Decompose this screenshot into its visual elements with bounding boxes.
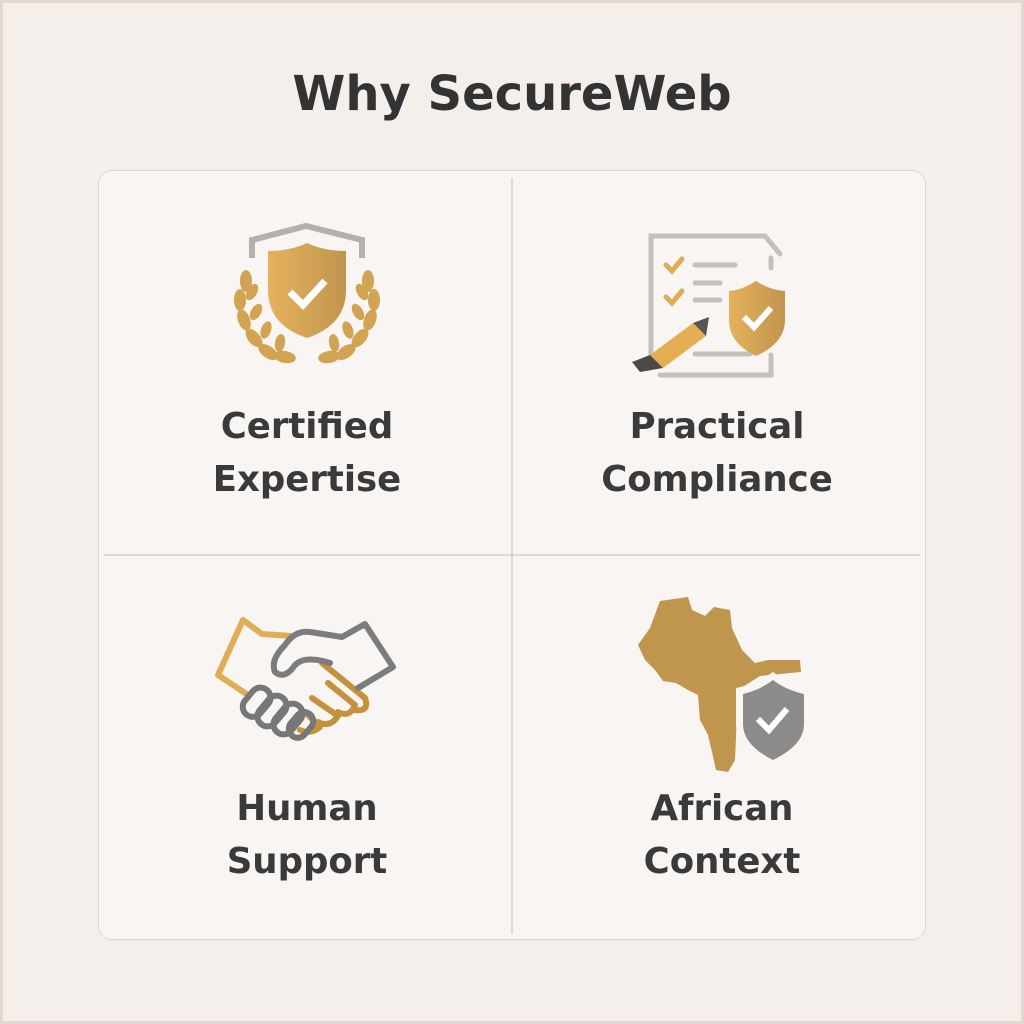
label: Certified Expertise — [213, 406, 401, 500]
label: Practical Compliance — [601, 406, 833, 500]
icon: handshake — [218, 620, 393, 742]
panel: grid — [98, 170, 926, 940]
label: Human Support — [227, 788, 387, 882]
label: Practical Compliance: Practical — [630, 406, 804, 447]
icon: africa with shield — [638, 597, 810, 772]
label: Certified Expertise: Expertise — [213, 459, 401, 500]
label: African Context: Context — [644, 841, 800, 882]
icon: shield with laurels — [234, 226, 380, 365]
label: Practical Compliance: Compliance — [601, 459, 833, 500]
title: Why SecureWeb — [292, 66, 732, 122]
label: African Context — [644, 788, 800, 882]
label: African Context: African — [651, 788, 793, 829]
icon: checklist document — [632, 236, 785, 375]
label: Human Support: Human — [236, 788, 378, 829]
label: Certified Expertise: Certified — [221, 406, 393, 447]
label: Human Support: Support — [227, 841, 387, 882]
